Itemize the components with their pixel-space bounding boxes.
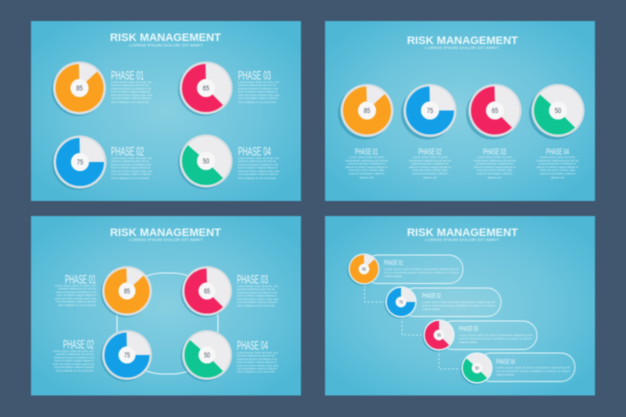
label: phase 02: PHASE 02	[111, 144, 144, 158]
gauge: phase 01 85	[347, 253, 380, 286]
label: phase 01: nisi ut aliquip ex ea commodo	[58, 303, 96, 307]
label: phase 04: PHASE 04	[238, 144, 271, 158]
label: phase 01: bore et dolore magna aliqua ut	[57, 293, 96, 297]
gauge: phase 03 65	[466, 84, 522, 140]
label: phase 01: PHASE 01	[65, 274, 96, 286]
label: phase 02: magna aliqua	[422, 307, 440, 311]
label: phase 01	[345, 148, 388, 180]
label: phase 02: nisi ut aliquip ex ea commodo	[111, 176, 149, 180]
label: phase 04: nisi ut aliquip ex ea commodo	[238, 176, 276, 180]
label: phase 03: rud exercitation ullamco laboris	[237, 300, 277, 304]
label: phase 03: eiusmod tempor incididunt ut	[476, 162, 513, 166]
label: phase 03: eiusmod tempor incididunt ut la	[237, 290, 277, 294]
gauge: phase 02 75	[52, 136, 106, 190]
label: phase 03: enim ad minim veniam quis	[477, 168, 513, 172]
label: phase 02: bore et dolore magna aliqua ut	[111, 166, 150, 170]
label: phase 03	[459, 326, 532, 344]
gauge: phase 04 50: 50	[475, 365, 480, 371]
label: phase 03	[238, 68, 280, 104]
label: phase 04: enim ad minim veniam quis nost	[237, 363, 278, 367]
label: phase 04: eiusmod tempor incididunt ut la	[237, 357, 277, 361]
pill: phase 04	[477, 353, 575, 382]
label: phase 04: sectetur adipiscing elit sed do	[237, 354, 275, 358]
label: phase 04: eiusmod tempor incididunt ut	[539, 162, 576, 166]
gauge: phase 02 75	[384, 286, 417, 319]
label: phase 04: enim ad minim veniam quis nost	[238, 169, 279, 173]
label: phase 02: eiusmod tempor incididunt ut la	[54, 355, 94, 359]
label: phase 02: enim ad minim veniam quis nost	[111, 169, 152, 173]
dashed connectors	[364, 285, 461, 369]
label: phase 04: laboris nisi	[551, 176, 565, 180]
label: phase 03: enim ad minim veniam quis nost	[237, 297, 278, 301]
label: phase 03: sectetur adipiscing elit sed do	[238, 83, 276, 87]
gauge: phase 01 85	[338, 84, 394, 140]
label: phase 03: labore et dolore magna aliqua ut	[474, 165, 515, 169]
label: phase 02: Lorem ipsum dolor sit amet	[413, 155, 448, 159]
label: phase 02: PHASE 02	[63, 340, 94, 352]
panel: top right row layout	[325, 21, 595, 201]
gauge: phase 02 75: 75	[427, 107, 433, 115]
label: phase 01: labore et dolore magna aliqua ut	[346, 165, 387, 169]
label: phase 03	[473, 148, 516, 180]
subtitle: LOREM IPSUM DOLOR SIT AMET	[425, 238, 500, 242]
label: phase 01: nisi ut aliquip ex ea commodo	[111, 100, 149, 104]
label: phase 02: sectetur adipiscing elit sed do	[56, 352, 94, 356]
label: phase 01: Lorem ipsum dolor sit amet	[349, 155, 384, 159]
label: phase 04: eiusmod tempor incididunt ut la	[238, 162, 278, 166]
gauge: phase 03 65: 65	[204, 288, 210, 296]
label: phase 01: eiusmod tempor incididunt ut la	[56, 290, 96, 294]
subtitle: LOREM IPSUM DOLOR SIT AMET	[425, 46, 500, 50]
label: phase 01: laboris nisi	[360, 176, 374, 180]
gauge: phase 02 75	[101, 330, 152, 381]
subtitle: LOREM IPSUM DOLOR SIT AMET	[129, 44, 204, 48]
label: phase 01: Lorem ipsum dolor sit amet consectetur adipiscing elit	[384, 267, 459, 271]
gauge: phase 04 50	[178, 134, 232, 189]
label: phase 03: rud exercitation ullamco laboris	[238, 96, 278, 100]
label: phase 02: enim ad minim veniam quis nost	[53, 362, 94, 366]
label: phase 02: eiusmod tempor incididunt ut	[412, 162, 449, 166]
label: phase 03: bore et dolore magna aliqua ut	[238, 90, 277, 94]
label: phase 03: magna aliqua	[459, 340, 477, 344]
gauge: phase 01 85: 85	[124, 288, 130, 296]
label: phase 04: Lorem ipsum dolor sit amet, con	[237, 350, 279, 354]
label: phase 01: Lorem ipsum dolor sit amet, con	[55, 284, 96, 288]
label: phase 03: Lorem ipsum dolor sit amet, con	[238, 80, 280, 84]
gauge: phase 04 50: 50	[204, 352, 210, 360]
label: phase 01: sed do eiusmod tempor incididunt ut labore et dolore	[384, 270, 459, 274]
label: phase 02	[111, 144, 153, 180]
gauge: phase 04 50: 50	[555, 107, 561, 115]
label: phase 01: eiusmod tempor incididunt ut la	[111, 86, 151, 90]
title: RISK MANAGEMENT	[110, 32, 221, 44]
label: phase 03: PHASE 03	[483, 148, 506, 156]
label: phase 04: bore et dolore magna aliqua ut	[237, 360, 276, 364]
label: phase 02: nisi ut aliquip ex ea commodo	[56, 368, 94, 372]
label: phase 02: PHASE 02	[422, 293, 441, 300]
label: phase 01: PHASE 01	[384, 260, 403, 267]
label: phase 03: nisi ut aliquip ex ea commodo	[237, 304, 275, 308]
label: phase 04: PHASE 04	[237, 340, 268, 352]
label: phase 02	[409, 148, 452, 180]
label: phase 01: eiusmod tempor incididunt ut	[348, 162, 385, 166]
label: phase 01: sectetur adipiscing elit sed do	[111, 83, 149, 87]
label: phase 02: bore et dolore magna aliqua ut	[55, 359, 94, 363]
label: phase 02	[53, 340, 95, 372]
gauge: phase 03 65: 65	[437, 332, 442, 338]
label: phase 02	[422, 293, 495, 311]
label: phase 03: consectetur adipiscing elit sed do	[473, 158, 516, 162]
pill: phase 01	[364, 255, 463, 284]
label: phase 03: bore et dolore magna aliqua ut	[237, 294, 276, 298]
label: phase 01: nostrud exercitation ullamco	[348, 172, 385, 176]
gauge: phase 02 75	[401, 84, 456, 140]
title: RISK MANAGEMENT	[407, 227, 518, 239]
label: phase 03: Lorem ipsum dolor sit amet, con	[237, 284, 279, 288]
connecting ring	[117, 273, 218, 374]
label: phase 04	[496, 359, 570, 376]
label: phase 03: enim ad minim veniam quis nost	[238, 93, 279, 97]
label: phase 04: magna aliqua	[496, 372, 514, 376]
label: phase 04: PHASE 04	[546, 148, 569, 156]
gauge: phase 04 50	[181, 330, 232, 381]
title: RISK MANAGEMENT	[407, 35, 518, 47]
label: phase 01: enim ad minim veniam quis nost	[55, 296, 96, 300]
label: phase 04: sectetur adipiscing elit sed do	[238, 159, 276, 163]
label: phase 01: rud exercitation ullamco laboris	[111, 96, 151, 100]
gauge: phase 04 50	[460, 352, 493, 385]
label: phase 01: sectetur adipiscing elit sed do	[58, 287, 96, 291]
label: phase 01: enim ad minim veniam quis nost	[111, 93, 152, 97]
label: phase 04: nostrud exercitation ullamco	[540, 172, 576, 176]
label: phase 01: enim ad minim veniam quis	[349, 168, 385, 172]
label: phase 01: bore et dolore magna aliqua ut	[111, 90, 150, 94]
label: phase 02: rud exercitation ullamco laboris	[54, 365, 95, 369]
gauge: phase 01 85: 85	[362, 266, 367, 272]
gauge: phase 03 65: 65	[203, 85, 209, 93]
label: phase 02: laboris nisi	[423, 176, 437, 180]
label: phase 01: PHASE 01	[355, 148, 378, 156]
gauge: phase 01 85: 85	[364, 107, 370, 115]
label: phase 01	[55, 274, 97, 307]
label: phase 02: PHASE 02	[418, 148, 442, 156]
label: phase 01: magna aliqua	[384, 274, 402, 278]
label: phase 02: Lorem ipsum dolor sit amet consectetur adipiscing elit	[422, 300, 495, 304]
label: phase 03: laboris nisi	[488, 176, 502, 180]
gauge: phase 02 75: 75	[77, 159, 83, 167]
label: phase 01: consectetur adipiscing elit sed do	[345, 158, 388, 162]
label: phase 04: labore et dolore magna aliqua ut	[537, 165, 578, 169]
label: phase 02: rud exercitation ullamco laboris	[111, 172, 151, 176]
label: phase 01	[111, 68, 153, 104]
label: phase 03: sed do eiusmod tempor incididunt ut labore et dolore	[459, 336, 532, 340]
panel: bottom left cycle layout	[31, 216, 301, 396]
label: phase 01: rud exercitation ullamco laboris	[56, 300, 97, 304]
label: phase 03: Lorem ipsum dolor sit amet	[477, 155, 512, 159]
label: phase 03: PHASE 03	[459, 326, 478, 333]
label: phase 04: nisi ut aliquip ex ea commodo	[237, 370, 275, 374]
label: phase 03	[237, 274, 279, 308]
label: phase 04	[536, 148, 579, 180]
label: phase 02: sed do eiusmod tempor incididunt ut labore et dolore	[422, 304, 495, 308]
label: phase 04: consectetur adipiscing elit sed do	[536, 158, 579, 162]
label: phase 01: PHASE 01	[111, 68, 144, 82]
label: phase 02: eiusmod tempor incididunt ut la	[111, 162, 151, 166]
panel: bottom right staircase layout	[325, 216, 595, 396]
label: phase 01	[384, 260, 459, 278]
gauge: phase 01 85	[101, 266, 152, 317]
label: phase 01: Lorem ipsum dolor sit amet, con	[111, 80, 153, 84]
label: phase 03: Lorem ipsum dolor sit amet consectetur adipiscing elit	[459, 333, 532, 337]
label: phase 04: rud exercitation ullamco laboris	[238, 172, 278, 176]
label: phase 02: labore et dolore magna aliqua ut	[409, 165, 451, 169]
panel: top left quadrant layout	[31, 21, 301, 201]
label: phase 02: sectetur adipiscing elit sed do	[111, 159, 149, 163]
label: phase 03: eiusmod tempor incididunt ut la	[238, 86, 278, 90]
gauge: phase 03 65	[181, 266, 232, 317]
label: phase 04	[238, 144, 280, 180]
label: phase 04: enim ad minim veniam quis	[540, 168, 576, 172]
label: phase 04: rud exercitation ullamco laboris	[237, 366, 277, 370]
label: phase 03: PHASE 03	[238, 68, 271, 82]
label: phase 04: Lorem ipsum dolor sit amet consectetur adipiscing elit	[496, 366, 570, 370]
label: phase 04: sed do eiusmod tempor incididunt ut labore et dolore	[496, 369, 570, 373]
gauge: phase 01 85	[52, 62, 106, 116]
gauge: phase 03 65	[178, 62, 232, 116]
gauge: phase 04 50: 50	[203, 158, 209, 166]
label: phase 04: bore et dolore magna aliqua ut	[238, 166, 277, 170]
label: phase 02: enim ad minim veniam quis	[412, 168, 448, 172]
gauge: phase 01 85: 85	[76, 85, 83, 93]
pill: phase 02	[401, 288, 501, 316]
label: phase 02: consectetur adipiscing elit sed do	[409, 158, 452, 162]
label: phase 04: PHASE 04	[496, 359, 515, 366]
label: phase 04: Lorem ipsum dolor sit amet	[540, 155, 575, 159]
label: phase 02: Lorem ipsum dolor sit amet, con	[111, 156, 153, 160]
label: phase 03: nostrud exercitation ullamco	[476, 172, 513, 176]
gauge: phase 02 75: 75	[124, 352, 130, 360]
label: phase 02: nostrud exercitation ullamco	[412, 172, 448, 176]
label: phase 04	[237, 340, 279, 374]
gauge: phase 03 65: 65	[492, 107, 498, 115]
label: phase 02: Lorem ipsum dolor sit amet, con	[53, 349, 94, 353]
label: phase 03: PHASE 03	[237, 274, 268, 286]
pill: phase 03	[439, 321, 537, 350]
label: phase 04: Lorem ipsum dolor sit amet, con	[238, 156, 280, 160]
title: RISK MANAGEMENT	[110, 227, 221, 239]
label: phase 03: sectetur adipiscing elit sed do	[237, 287, 275, 291]
gauge: phase 03 65	[422, 319, 455, 352]
gauge: phase 04 50	[529, 84, 584, 140]
subtitle: LOREM IPSUM DOLOR SIT AMET	[129, 238, 204, 242]
label: phase 03: nisi ut aliquip ex ea commodo	[238, 100, 276, 104]
gauge: phase 02 75: 75	[399, 299, 404, 305]
